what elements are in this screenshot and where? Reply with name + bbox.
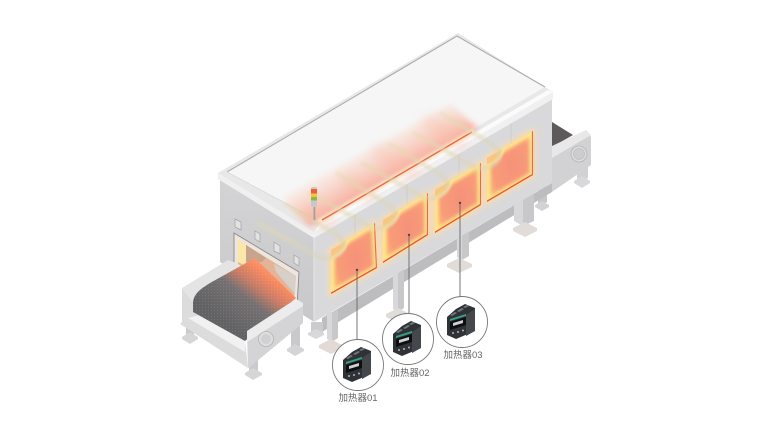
left end and lower frame — [180, 288, 248, 368]
left conveyor section — [180, 258, 304, 380]
heated windows — [310, 131, 533, 294]
roof edge heat line — [318, 131, 474, 222]
roof heat glow — [282, 104, 478, 226]
right conveyor section — [535, 122, 591, 211]
conveyor wheel — [258, 332, 274, 346]
under beam — [322, 183, 552, 332]
label: heater 02: 加热器02 — [390, 367, 430, 379]
heater 02 — [382, 314, 434, 364]
right conveyor feet — [535, 160, 590, 211]
right wall — [314, 98, 552, 322]
window glows — [331, 131, 533, 294]
leg 5 — [513, 189, 537, 237]
window 1 — [331, 223, 377, 294]
heat pipes — [256, 113, 500, 258]
wall seams — [355, 122, 511, 250]
conveyor belt — [193, 258, 296, 341]
roof rim — [218, 33, 553, 238]
roof top — [227, 36, 545, 220]
right conveyor frame — [552, 132, 591, 192]
window 4 — [487, 131, 533, 202]
right conveyor wheel — [571, 146, 587, 162]
stack light — [311, 187, 317, 220]
near rail — [247, 303, 303, 368]
leg 1 — [319, 309, 342, 354]
heater 01 — [332, 340, 384, 390]
window 2 — [383, 193, 428, 263]
back rail — [182, 260, 240, 302]
furnace body — [220, 98, 552, 322]
leg 3 — [447, 224, 472, 273]
roof — [218, 33, 553, 238]
right conveyor belt — [552, 122, 573, 147]
furnace opening — [234, 233, 299, 306]
leg 2 — [386, 269, 410, 323]
label: heater 03: 加热器03 — [443, 349, 483, 361]
leader line 3 — [459, 202, 461, 297]
furnace legs — [308, 189, 537, 354]
illustration: conveyor furnace with heaters — [180, 33, 591, 402]
window 3 — [435, 163, 481, 233]
left wall — [220, 178, 314, 322]
leader line 1 — [356, 269, 358, 340]
heater 03 — [436, 296, 488, 348]
leader line 2 — [408, 234, 410, 314]
left wall vents — [235, 219, 299, 266]
label: heater 01: 加热器01 — [338, 392, 378, 404]
conveyor feet — [182, 318, 304, 380]
rear leg — [308, 322, 324, 339]
